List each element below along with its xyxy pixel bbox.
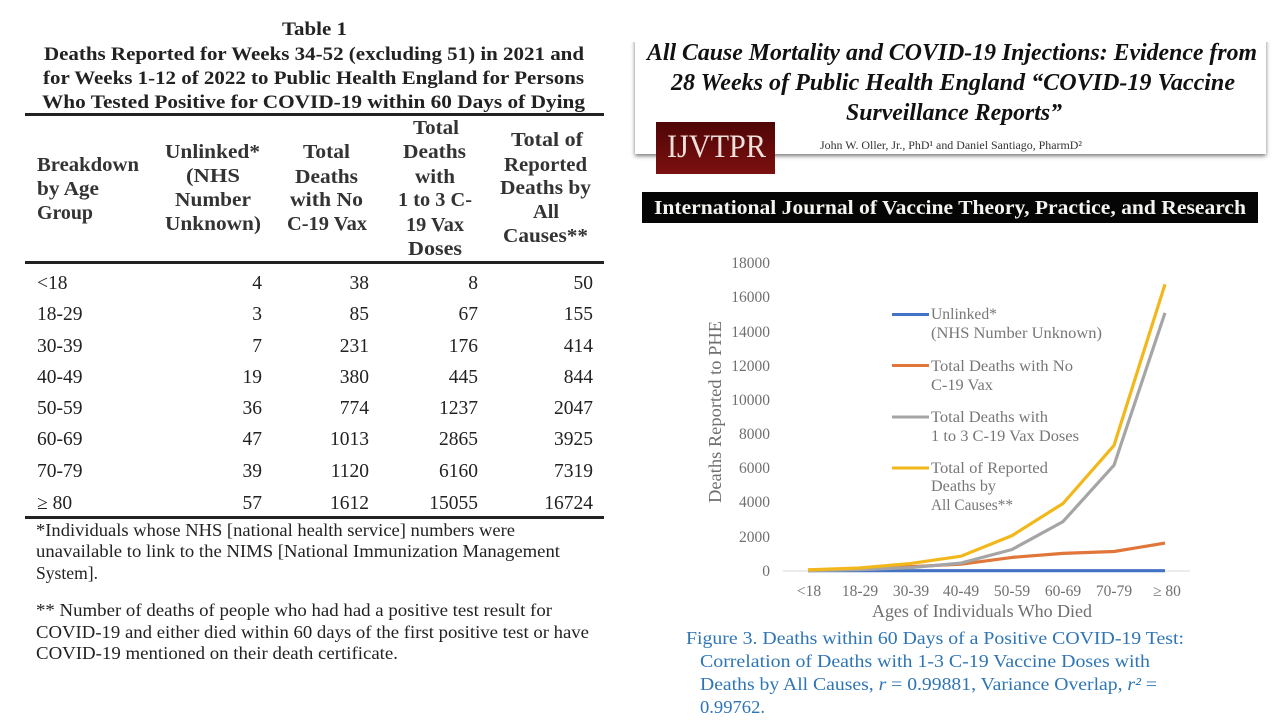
table data rows: 4: [252, 273, 262, 294]
table data rows: 19: [242, 367, 262, 388]
table data rows: 1120: [331, 461, 369, 482]
legend: 1 to 3 doses: Total Deaths with: [931, 409, 1048, 426]
table data rows: 3: [252, 304, 262, 325]
table title: Who Tested Positive for COVID-19 within 60 Days of Dying: [42, 92, 586, 113]
panel: mortality table: [25, 19, 604, 663]
table header row: Deaths: [295, 167, 358, 188]
legend: [892, 306, 1102, 514]
legend: all causes: Deaths by: [931, 478, 996, 495]
footnote: all causes: COVID-19 mentioned on their death certificate.: [36, 643, 398, 663]
table data rows: 1237: [439, 398, 478, 419]
table header row: Number: [175, 190, 251, 211]
journal name bar: [642, 192, 1258, 223]
y axis labels: 6000: [739, 460, 770, 477]
x axis labels: [797, 583, 1181, 600]
table data rows: 176: [449, 336, 478, 357]
y axis labels: 12000: [731, 358, 770, 375]
figure caption: Deaths by All Causes, r = 0.99881, Variance Overlap, r² =: [700, 674, 1157, 694]
table data rows: 40-49: [37, 367, 82, 388]
table header row: (NHS: [186, 166, 240, 187]
legend: no vax: C-19 Vax: [931, 377, 993, 394]
table header row: Doses: [408, 239, 462, 260]
y axis labels: 0: [762, 563, 770, 580]
table data rows: 7: [252, 336, 262, 357]
x axis labels: 18-29: [842, 583, 878, 600]
table data rows: ≥ 80: [37, 493, 72, 514]
table title: Table 1: [282, 19, 347, 40]
table data rows: 39: [242, 461, 262, 482]
table data rows: 231: [340, 336, 369, 357]
table header row: Reported: [504, 155, 587, 176]
table data rows: 7319: [554, 461, 593, 482]
table data rows: 774: [340, 398, 369, 419]
legend: unlinked: (NHS Number Unknown): [931, 325, 1102, 342]
table header row: 19 Vax: [406, 215, 464, 236]
table data rows: 414: [564, 336, 593, 357]
x axis labels: 60-69: [1045, 583, 1081, 600]
table data rows: 445: [449, 367, 478, 388]
table header row: 1 to 3 C-: [398, 190, 472, 211]
figure caption: Correlation of Deaths with 1-3 C-19 Vaccine Doses with: [700, 651, 1150, 671]
journal name bar: International Journal of Vaccine Theory, Practice, and Research: [654, 197, 1246, 219]
table data rows: 844: [564, 367, 593, 388]
footnote: unlinked: *Individuals whose NHS [national health service] numbers were: [36, 520, 515, 540]
table data rows: 15055: [429, 493, 478, 514]
table data rows: 60-69: [37, 429, 82, 450]
table data rows: 8: [468, 273, 478, 294]
article title: [645, 40, 1257, 126]
footnote: all causes: [36, 600, 589, 663]
line chart: deaths by age: [705, 255, 1190, 621]
footnote: unlinked: [36, 520, 560, 583]
table data rows: 16724: [544, 493, 593, 514]
table header row: Unknown): [165, 214, 261, 235]
table title: [42, 19, 586, 113]
x axis labels: ≥ 80: [1153, 583, 1181, 600]
table header row: with: [415, 167, 455, 188]
table header row: Total of: [511, 130, 584, 151]
legend: 1 to 3 doses: [892, 409, 1079, 445]
y axis labels: 10000: [731, 392, 770, 409]
series: 1 to 3 doses: [808, 313, 1165, 571]
y axis labels: 14000: [731, 324, 770, 341]
table data rows: 380: [340, 367, 369, 388]
y axis title: Deaths Reported to PHE: [705, 321, 725, 503]
table header row: C-19 Vax: [287, 214, 367, 235]
journal logo: [656, 122, 775, 174]
table data rows: 85: [350, 304, 369, 325]
figure caption: Figure 3. Deaths within 60 Days of a Positive COVID-19 Test:: [686, 628, 1184, 648]
table header row: Unlinked*: [165, 142, 260, 163]
series: all causes: [808, 284, 1165, 570]
table data rows: 67: [458, 304, 478, 325]
table data rows: <18: [37, 273, 68, 294]
axis line: [783, 570, 1190, 572]
y axis labels: 8000: [739, 426, 770, 443]
x axis labels: 50-59: [994, 583, 1030, 600]
table data rows: 3925: [554, 429, 593, 450]
table header row: Group: [37, 203, 93, 224]
table header row: Deaths: [403, 142, 466, 163]
y axis labels: 2000: [739, 529, 770, 546]
table data rows: 1013: [330, 429, 369, 450]
y axis labels: 16000: [731, 289, 770, 306]
footnote: all causes: ** Number of deaths of people who had had a positive test result for: [36, 600, 552, 620]
table data rows: 18-29: [37, 304, 82, 325]
article title: 28 Weeks of Public Health England “COVID-19 Vaccine: [670, 70, 1235, 96]
table header row: Causes**: [503, 226, 588, 247]
figure caption: [686, 628, 1184, 717]
legend: unlinked: [892, 306, 1102, 342]
footnote: unlinked: unavailable to link to the NIMS [National Immunization Management: [36, 541, 560, 561]
legend: no vax: Total Deaths with No: [931, 358, 1073, 375]
panel: article banner: [625, 20, 1280, 174]
table data rows: 6160: [439, 461, 478, 482]
table data rows: 57: [242, 493, 262, 514]
legend: all causes: [892, 460, 1048, 514]
table data rows: 50-59: [37, 398, 82, 419]
table header row: Deaths by: [500, 178, 591, 199]
legend: all causes: Total of Reported: [931, 460, 1048, 477]
legend: no vax: [892, 358, 1073, 394]
y axis labels: 18000: [731, 255, 770, 272]
table data rows: 2047: [554, 398, 593, 419]
x axis title: Ages of Individuals Who Died: [872, 601, 1092, 621]
table header row: Total: [413, 118, 460, 139]
table data rows: 70-79: [37, 461, 82, 482]
table header row: All: [533, 202, 560, 223]
table data rows: 50: [574, 273, 593, 294]
legend: 1 to 3 doses: 1 to 3 C-19 Vax Doses: [931, 428, 1079, 445]
article title: Surveillance Reports”: [846, 100, 1062, 126]
x axis labels: 40-49: [943, 583, 979, 600]
y axis labels: [731, 255, 770, 580]
table header row: [37, 118, 591, 260]
legend: unlinked: Unlinked*: [931, 306, 997, 323]
footnote: unlinked: System].: [36, 563, 98, 583]
table data rows: 30-39: [37, 336, 82, 357]
x axis labels: 30-39: [893, 583, 929, 600]
table title: for Weeks 1-12 of 2022 to Public Health England for Persons: [43, 68, 584, 89]
table data rows: 36: [242, 398, 262, 419]
table data rows: 47: [242, 429, 262, 450]
table header row: with No: [290, 190, 363, 211]
table data rows: 38: [350, 273, 369, 294]
article title: All Cause Mortality and COVID-19 Injections: Evidence from: [645, 40, 1257, 66]
legend: all causes: All Causes**: [931, 497, 1013, 514]
table header row: Total: [303, 142, 351, 163]
x axis labels: 70-79: [1096, 583, 1132, 600]
series: unlinked: [808, 569, 1165, 572]
series: no vax: [808, 543, 1165, 570]
table header row: by Age: [37, 179, 99, 200]
table data rows: 2865: [439, 429, 478, 450]
table header row: Breakdown: [37, 155, 139, 176]
figure caption: 0.99762.: [700, 697, 765, 717]
table title: Deaths Reported for Weeks 34-52 (excluding 51) in 2021 and: [44, 44, 584, 65]
authors: John W. Oller, Jr., PhD¹ and Daniel Santiago, PharmD²: [820, 140, 1083, 152]
footnote: all causes: COVID-19 and either died within 60 days of the first positive test or have: [36, 622, 589, 642]
x axis labels: <18: [797, 583, 821, 600]
journal logo: IJVTPR: [667, 129, 766, 165]
table data rows: 155: [564, 304, 593, 325]
table data rows: [37, 273, 593, 514]
table data rows: 1612: [330, 493, 369, 514]
y axis labels: 4000: [739, 494, 770, 511]
